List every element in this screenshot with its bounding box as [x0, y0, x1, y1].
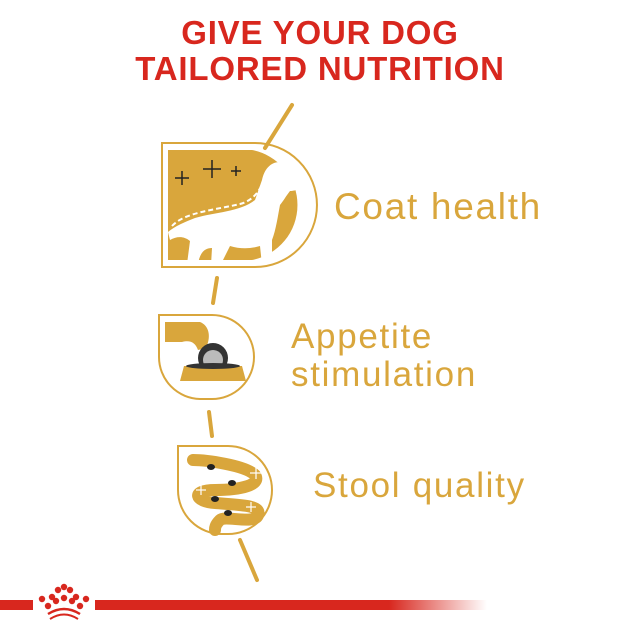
- icon: appetite bowl: [159, 315, 254, 399]
- text: coat health: Coat health: [334, 186, 542, 227]
- icon: intestine: [178, 446, 272, 534]
- text: appetite stimulation: Appetite: [291, 317, 433, 356]
- text: appetite stimulation: stimulation: [291, 355, 477, 394]
- text: stool quality: Stool quality: [313, 466, 526, 505]
- connector line segments: [209, 105, 292, 580]
- title: [135, 14, 505, 87]
- title: TAILORED NUTRITION: [135, 50, 505, 87]
- footer bar with crown logo: [0, 584, 487, 619]
- text: appetite stimulation: [291, 317, 477, 394]
- title: GIVE YOUR DOG: [181, 14, 459, 51]
- icon: dog coat: [162, 143, 317, 267]
